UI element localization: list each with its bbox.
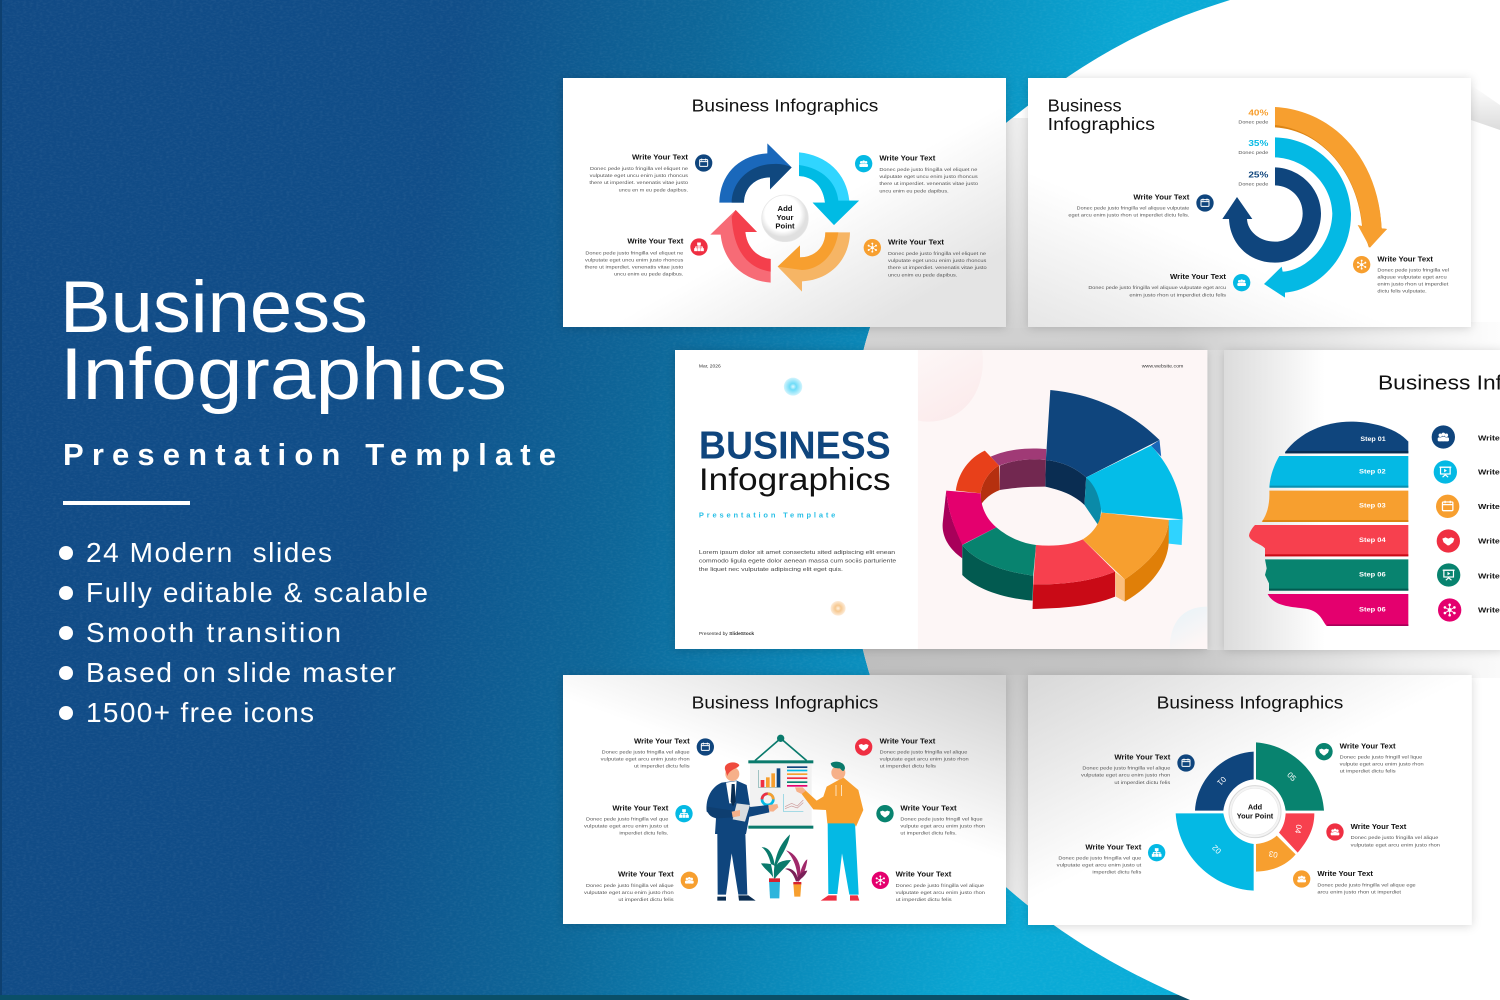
- text block bottom right: there ut imperdiet. venenatis vitae justo: [888, 265, 987, 271]
- icon: handshake green: [876, 805, 894, 822]
- text block: 01: vulputate eget arcu enim justo rhon: [1081, 773, 1171, 779]
- text block: 04: Donec pede justo fringilla vel alique: [1351, 835, 1439, 841]
- segment numbers: 04: [1293, 824, 1303, 835]
- panel: slide 1 cycle arrows: [563, 78, 1006, 327]
- slide 2 title: Business: [1048, 95, 1122, 115]
- text block: middle left: Write Your Text: [612, 805, 669, 812]
- cover heading: Infographics: [699, 461, 891, 497]
- cover heading: BUSINESS: [699, 424, 891, 467]
- panel: slide 6 segmented wheel: [1028, 675, 1472, 925]
- text block: 05: vulpute eget arcu enim justo rhon: [1340, 762, 1424, 768]
- arrow: orange: [778, 232, 850, 292]
- icon: network: [1353, 256, 1370, 273]
- segment numbers: [1210, 770, 1303, 859]
- text block: middle left: [584, 805, 669, 836]
- text block: bottom right: Write Your Text: [896, 872, 952, 879]
- slide 1 title: Business Infographics: [692, 95, 878, 115]
- text block: bottom left: ut imperdiet dictu felis: [618, 897, 674, 903]
- head step 04: [1249, 525, 1408, 556]
- text block: bottom left: vulputate eget arcu enim justo rhon: [584, 890, 674, 896]
- text block: middle right: Write Your Text: [900, 805, 957, 812]
- text block: 05: ut imperdiet dictu felis: [1340, 769, 1396, 775]
- text block left: Donec pede justo fringilla vel aliquue vulputate: [1077, 205, 1190, 211]
- arrow: orange 40%: [1275, 107, 1387, 248]
- text block: bottom right: Donec pede justo fringilla vel alique: [896, 883, 984, 889]
- icon: calendar: [1196, 194, 1214, 212]
- text block top right: there ut imperdiet. venenatis vitae justo: [879, 181, 978, 187]
- segment numbers: 03: [1268, 849, 1279, 859]
- text block: top right: vulputate eget arcu enim justo rhon: [880, 757, 969, 763]
- cover heading: [699, 424, 891, 497]
- cover paragraph: the liquet nec vulputate adipiscing elit eget quis.: [699, 567, 843, 573]
- main title: [60, 267, 507, 415]
- icon: people orange: [1293, 870, 1310, 888]
- text block top right: Write Your Text: [879, 155, 936, 162]
- date and website: www.website.com: [1142, 364, 1184, 369]
- text block: top right: Donec pede justo fringilla vel alique: [880, 750, 968, 756]
- head step 06: [1268, 594, 1408, 626]
- divider: [63, 501, 190, 505]
- segment 03: [1256, 836, 1296, 872]
- text block bottom: Donec pede justo fringilla vel aliquue vulputate eget arcu: [1088, 285, 1226, 291]
- slide 2 title: [1048, 95, 1155, 134]
- percentage labels: 25%: [1248, 169, 1269, 179]
- panel: slide 3 cover with donut: [675, 350, 1207, 649]
- text block left: eget arcu enim justo rhon ut imperdiet dictu felis.: [1068, 213, 1189, 219]
- text block: 03: Donec pede justo fringilla vel alique ege: [1317, 882, 1416, 888]
- step labels: Step 04: [1359, 537, 1386, 544]
- panel: slide 5 business people: [563, 675, 1006, 924]
- feature list: [59, 537, 428, 728]
- text block: top left: ut imperdiet dictu felis: [634, 764, 690, 770]
- text block: bottom right: ut imperdiet dictu felis: [896, 897, 952, 903]
- text block: 04: vulputate eget arcu enim justo rhon: [1351, 842, 1440, 848]
- arrow: cyan: [799, 152, 859, 225]
- center hub: [1227, 784, 1283, 840]
- arrow: blue: [719, 143, 792, 203]
- icon: handshake: [1315, 743, 1333, 760]
- percentage labels: Donec pede: [1238, 150, 1269, 156]
- center hub: Add: [1248, 802, 1262, 811]
- step labels: Step 06: [1359, 606, 1386, 613]
- text block top right: [879, 155, 978, 194]
- text block: middle right: [900, 805, 985, 836]
- icon: calendar: [695, 154, 712, 172]
- text block: middle left: imperdiet dictu felis.: [619, 830, 668, 836]
- text block: middle right: vulpute eget arcu enim justo rhon: [900, 823, 985, 829]
- cover subtitle: Presentation Template: [699, 510, 835, 519]
- center circle: [762, 195, 808, 242]
- presenter: Presented by SlideStock: [699, 631, 755, 637]
- text block: bottom right: [896, 872, 985, 903]
- icon: people: [1326, 823, 1344, 841]
- text block: 02: Donec pede justo fringilla vel que: [1058, 855, 1142, 861]
- text block: middle left: Donec pede justo fringilla vel que: [586, 816, 669, 822]
- text block top left: there ut imperdiet. venenatis vitae justo: [589, 180, 688, 186]
- text block bottom left: Donec pede justo fringilla vel eliquet ne: [585, 250, 684, 256]
- text block: 04: [1351, 824, 1440, 848]
- step labels: Step 06: [1359, 572, 1386, 579]
- icon: hierarchy: [675, 805, 693, 822]
- feature list: Smooth transition: [86, 617, 341, 648]
- percentage labels: [1238, 108, 1269, 187]
- text block: top left: Donec pede justo fringilla vel alique: [602, 750, 690, 756]
- text block: middle right: ut imperdiet dictu felis.: [900, 830, 957, 836]
- text block left: Write Your Text: [1133, 194, 1190, 201]
- text block: 04: Write Your Text: [1351, 824, 1407, 831]
- man in suit: [706, 762, 778, 901]
- text block: 03: arcu enim justo rhon ut imperdiet: [1317, 889, 1402, 895]
- text block: 01: Write Your Text: [1114, 754, 1171, 761]
- panel: slide 4 head steps: [1224, 350, 1500, 650]
- icon: people: [1233, 274, 1250, 291]
- percentage labels: 35%: [1248, 138, 1269, 148]
- text block bottom right: [888, 239, 987, 278]
- text block right: aliquue vulputate eget arcu: [1377, 275, 1447, 281]
- step labels: [1359, 436, 1386, 613]
- slide 5 title: Business Infographics: [692, 692, 878, 712]
- center hub: Your Point: [1237, 811, 1274, 820]
- arrow: cyan 35%: [1264, 137, 1351, 298]
- segment 02: [1176, 813, 1254, 891]
- cover paragraph: [699, 550, 896, 573]
- text block: top left: Write Your Text: [634, 739, 690, 746]
- man in hoodie: [795, 762, 863, 901]
- cover paragraph: Lorem ipsum dolor sit amet consectetu sited adipiscing elit enean: [699, 550, 895, 556]
- main title: Infographics: [60, 334, 507, 415]
- text block: 01: [1081, 754, 1171, 786]
- icon: network: [864, 239, 881, 256]
- presentation board: [748, 735, 813, 829]
- text block: top left: [601, 739, 690, 770]
- text block: 01: Donec pede justo fringilla vel alique: [1082, 766, 1171, 772]
- 3D donut chart: [943, 390, 1183, 609]
- text block bottom right: uncu enim eu pede dapibus.: [888, 272, 957, 278]
- text block bottom: [1088, 274, 1227, 298]
- text block bottom left: Write Your Text: [627, 239, 684, 246]
- text block top left: vulputate eget uncu enim justo rhoncus: [590, 173, 689, 179]
- text block right: Donec pede justo fringilla vel: [1377, 267, 1449, 273]
- decorative circles: [784, 350, 1207, 649]
- text block: top left: vulputate eget arcu enim justo rhon: [601, 757, 690, 763]
- segment numbers: 02: [1210, 842, 1223, 856]
- text block: top right: [880, 739, 969, 770]
- step icons: [1432, 425, 1461, 622]
- text block bottom right: Donec pede justo fringilla vel eliquet ne: [888, 251, 986, 257]
- text block: 05: [1340, 743, 1424, 775]
- segment 05: [1256, 742, 1324, 811]
- icon: people red: [855, 738, 872, 756]
- head step 03: [1262, 491, 1408, 522]
- date and website: [699, 364, 1184, 369]
- segment numbers: 05: [1285, 770, 1298, 783]
- slide 6 title: Business Infographics: [1157, 692, 1343, 712]
- text block bottom left: there ut imperdiet. venenatis vitae justo: [585, 264, 684, 270]
- text block top left: [589, 154, 689, 193]
- text block: 05: Donec pede justo fringill vel lique: [1340, 754, 1423, 760]
- feature list: Fully editable & scalable: [86, 577, 428, 608]
- step labels: Step 02: [1359, 469, 1386, 476]
- text block top right: uncu enim eu pede dapibus.: [879, 188, 949, 194]
- icon: calendar: [1177, 754, 1195, 772]
- text block bottom left: vulputate eget uncu enim justo rhoncus: [585, 257, 684, 263]
- text block: 05: Write Your Text: [1340, 743, 1396, 750]
- feature list: Based on slide master: [86, 657, 396, 688]
- percentage labels: Donec pede: [1238, 181, 1269, 187]
- text block: 02: [1057, 844, 1142, 875]
- icon: people: [681, 872, 698, 889]
- arrow: red: [710, 210, 771, 283]
- cover right background: [918, 350, 1207, 649]
- head step 02: [1269, 456, 1408, 488]
- text block: 02: Write Your Text: [1085, 844, 1142, 851]
- text block bottom right: Write Your Text: [888, 239, 945, 246]
- text block top left: uncu en m eu pede dapibus.: [619, 187, 688, 193]
- percentage labels: Donec pede: [1238, 120, 1269, 126]
- plants: [761, 834, 807, 898]
- text block top left: Donec pede justo fringilla vel eliquet ne: [590, 166, 688, 172]
- icon: hierarchy: [690, 238, 708, 256]
- text block: 01: ut imperdiet dictu felis: [1114, 780, 1171, 786]
- text block bottom: enim justo rhon ut imperdiet dictu felis: [1129, 292, 1227, 298]
- percentage labels: 40%: [1248, 108, 1269, 118]
- text block: middle right: Donec pede justo fringill vel lique: [900, 816, 983, 822]
- head step 05: [1265, 559, 1408, 591]
- arrow: navy 25%: [1222, 167, 1321, 263]
- segment numbers: 01: [1215, 775, 1228, 788]
- text block: 02: vulputate eget arcu enim justo ut: [1057, 862, 1142, 868]
- text block: bottom left: Write Your Text: [618, 872, 674, 879]
- text block right: dictu felis vulputate.: [1377, 289, 1427, 295]
- text block left: [1068, 194, 1190, 219]
- segment 04: [1279, 813, 1314, 853]
- text block: 02: imperdiet dictu felis: [1092, 869, 1142, 875]
- text block right: [1377, 256, 1449, 295]
- text block bottom left: [585, 239, 684, 278]
- cover paragraph: commodo ligula egete dolor aenean massa cum sociis parturiente: [699, 559, 896, 565]
- text block bottom: Write Your Text: [1170, 274, 1227, 281]
- text block top right: vulputate eget uncu enim justo rhoncus: [879, 174, 978, 180]
- text block: top right: ut imperdiet dictu felis: [880, 764, 937, 770]
- text block: bottom right: vulputate eget arcu enim justo rhon: [896, 890, 985, 896]
- text block: 03: Write Your Text: [1317, 871, 1374, 878]
- text block bottom left: uncu enim eu pede dapibus.: [614, 272, 683, 278]
- step labels: Step 01: [1360, 436, 1386, 443]
- text block top right: Donec pede justo fringilla vel eliquet ne: [879, 167, 978, 173]
- feature list: 24 Modern slides: [86, 537, 332, 568]
- text block top left: Write Your Text: [632, 154, 689, 161]
- text block: bottom left: Donec pede justo fringilla vel alique: [586, 883, 674, 889]
- text block: middle left: vulputate eget arcu enim justo ut: [584, 823, 669, 829]
- text block: bottom left: [584, 872, 674, 903]
- step labels: Step 03: [1359, 503, 1386, 510]
- feature list: 1500+ free icons: [86, 697, 314, 728]
- center circle: Your: [777, 213, 793, 222]
- segment 01: [1195, 752, 1254, 811]
- main title: Business: [60, 267, 368, 348]
- text block: top right: Write Your Text: [880, 739, 936, 746]
- center circle: Point: [775, 222, 795, 231]
- date and website: Mar, 2026: [699, 364, 721, 369]
- text block bottom right: vulputate eget uncu enim justo rhoncus: [888, 258, 987, 264]
- text block right: enim justo rhon ut imperdiet: [1377, 282, 1449, 288]
- slide 2 title: Infographics: [1048, 114, 1155, 134]
- text block: 03: [1317, 871, 1416, 895]
- icon: people: [855, 155, 872, 172]
- subtitle: Presentation Template: [63, 437, 556, 472]
- white curved background shape: [840, 0, 1500, 1000]
- icon: calendar: [697, 738, 714, 756]
- center circle: Add: [778, 204, 793, 213]
- panel: slide 2 spiral arrows: [1028, 78, 1471, 327]
- text block right: Write Your Text: [1377, 256, 1434, 263]
- step headings: [1478, 433, 1500, 615]
- icon: hierarchy: [1148, 844, 1165, 861]
- head step 01: [1285, 422, 1408, 453]
- icon: network: [872, 872, 889, 889]
